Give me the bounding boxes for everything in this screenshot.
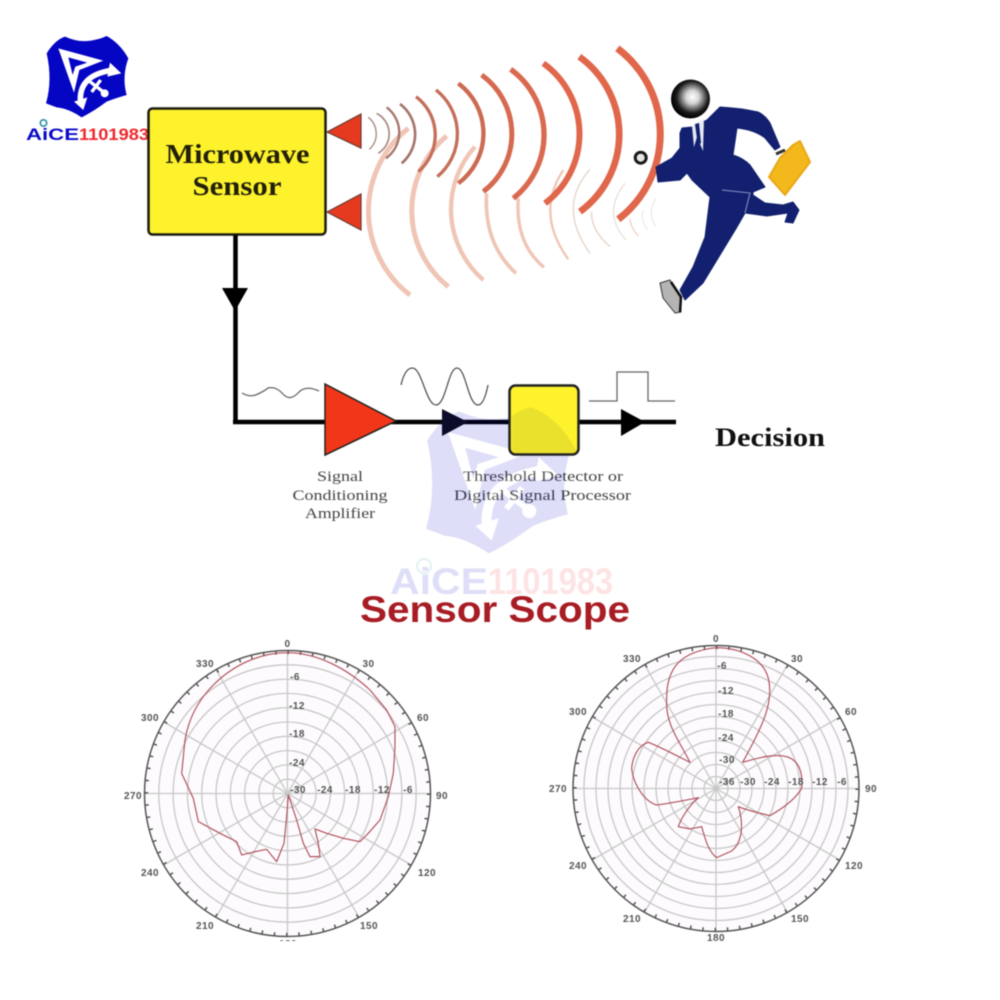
- arrow: detector to decision: [621, 409, 645, 436]
- logo text: AiCE: [26, 126, 79, 144]
- radiation pattern curve: [182, 653, 395, 862]
- panel: microwave sensor box: [148, 108, 326, 234]
- angle labels: 60: [417, 713, 429, 724]
- decibel labels: -6: [403, 785, 413, 796]
- angle labels: 330: [196, 659, 214, 670]
- panel: threshold detector box: [510, 386, 578, 454]
- heading: sensor scope: Sensor Scope: [360, 589, 630, 630]
- briefcase: [769, 141, 810, 195]
- shoe: [660, 280, 681, 313]
- decibel labels: -12: [812, 777, 828, 788]
- watermark shield: [426, 410, 571, 553]
- watermark text: AiCE: [390, 561, 488, 602]
- arrow: sensor to amplifier: [222, 235, 248, 422]
- logo shield: [46, 36, 128, 117]
- decibel labels: -6: [837, 777, 847, 788]
- decibel labels: -18: [345, 785, 361, 796]
- polar grid: [144, 650, 430, 936]
- decibel labels: -24: [289, 758, 305, 769]
- angle labels: 210: [623, 914, 641, 925]
- decibel labels: -18: [788, 777, 804, 788]
- chart: weak input signal: [242, 388, 319, 398]
- text: amplifier caption: Amplifier: [305, 506, 375, 522]
- angle labels: 30: [791, 654, 803, 665]
- arrow: amplifier to detector: [442, 409, 468, 436]
- hand ball: [635, 152, 646, 163]
- angle labels: 90: [865, 784, 877, 795]
- decibel labels: [289, 672, 413, 796]
- angle labels: 120: [418, 868, 436, 879]
- polar grid: [573, 646, 859, 932]
- shoe sole: [671, 282, 681, 312]
- angle labels: 210: [196, 921, 214, 932]
- angle labels: 270: [549, 784, 567, 795]
- decibel labels: -6: [717, 661, 727, 672]
- decibel labels: -6: [290, 672, 300, 683]
- briefcase handle: [776, 150, 785, 154]
- angle labels: 240: [569, 861, 587, 872]
- shirt and tie: [692, 119, 704, 151]
- decibel labels: [717, 661, 847, 788]
- radiation pattern curve: [632, 648, 802, 858]
- text: detector caption: Threshold Detector or: [463, 469, 623, 485]
- angle labels: 180: [279, 939, 297, 950]
- angle labels: [549, 634, 877, 944]
- angle labels: 60: [845, 707, 857, 718]
- decibel labels: -30: [740, 777, 756, 788]
- chart: left polar plot: [124, 639, 448, 951]
- decibel labels: -24: [764, 777, 780, 788]
- angle labels: 0: [713, 634, 719, 645]
- angle labels: [124, 639, 448, 950]
- watermark tint on box: [512, 408, 576, 453]
- angle labels: 150: [791, 914, 809, 925]
- heading: microwave sensor: Sensor: [192, 171, 282, 201]
- transmitted waves: [368, 48, 660, 219]
- decibel labels: -30: [719, 755, 735, 766]
- decibel labels: -18: [718, 709, 734, 720]
- decibel labels: -30: [290, 785, 306, 796]
- logo: [26, 36, 149, 144]
- angle labels: 30: [363, 659, 374, 670]
- angle labels: 330: [623, 654, 641, 665]
- angle labels: 300: [569, 707, 587, 718]
- angle labels: 120: [845, 861, 863, 872]
- angle labels: 0: [285, 639, 291, 650]
- decibel labels: -24: [317, 785, 333, 796]
- watermark: pale logo: [390, 410, 613, 602]
- angle labels: 240: [141, 868, 159, 879]
- angle labels: 300: [141, 713, 159, 724]
- heading: microwave sensor: Microwave: [166, 139, 310, 169]
- trouser highlight: [722, 190, 750, 213]
- angle labels: 180: [707, 933, 725, 944]
- logo text: 1101983: [79, 126, 149, 144]
- decibel labels: -18: [289, 729, 305, 740]
- icon: running businessman: [635, 80, 810, 313]
- decibel labels: -36: [719, 777, 735, 788]
- head: [671, 80, 710, 118]
- decibel labels: -12: [374, 785, 390, 796]
- person body: [656, 107, 799, 300]
- text: amplifier caption: Signal: [317, 469, 363, 485]
- chart: output pulse: [589, 372, 675, 401]
- necktie: [695, 123, 701, 146]
- text: decision: Decision: [715, 423, 826, 452]
- chart: amplified sine signal: [401, 368, 488, 405]
- logo small globe: [40, 120, 47, 126]
- text: detector caption: Digital Signal Processor: [454, 488, 631, 504]
- angle labels: 270: [124, 791, 142, 802]
- text: amplifier caption: Conditioning: [292, 488, 388, 504]
- watermark globe: [417, 559, 431, 573]
- crop mask: [260, 941, 320, 951]
- decibel labels: -24: [718, 733, 734, 744]
- angle labels: 150: [360, 921, 378, 932]
- reflected waves: [368, 128, 656, 295]
- decibel labels: -12: [718, 686, 734, 697]
- decibel labels: -12: [289, 701, 305, 712]
- icon: transmit and receive antennas: [327, 114, 361, 230]
- angle labels: 90: [436, 791, 448, 802]
- signal chain line: [233, 420, 676, 424]
- chart: right polar plot: [549, 634, 877, 944]
- icon: amplifier triangle: [325, 384, 396, 455]
- watermark text: 1101983: [488, 561, 613, 602]
